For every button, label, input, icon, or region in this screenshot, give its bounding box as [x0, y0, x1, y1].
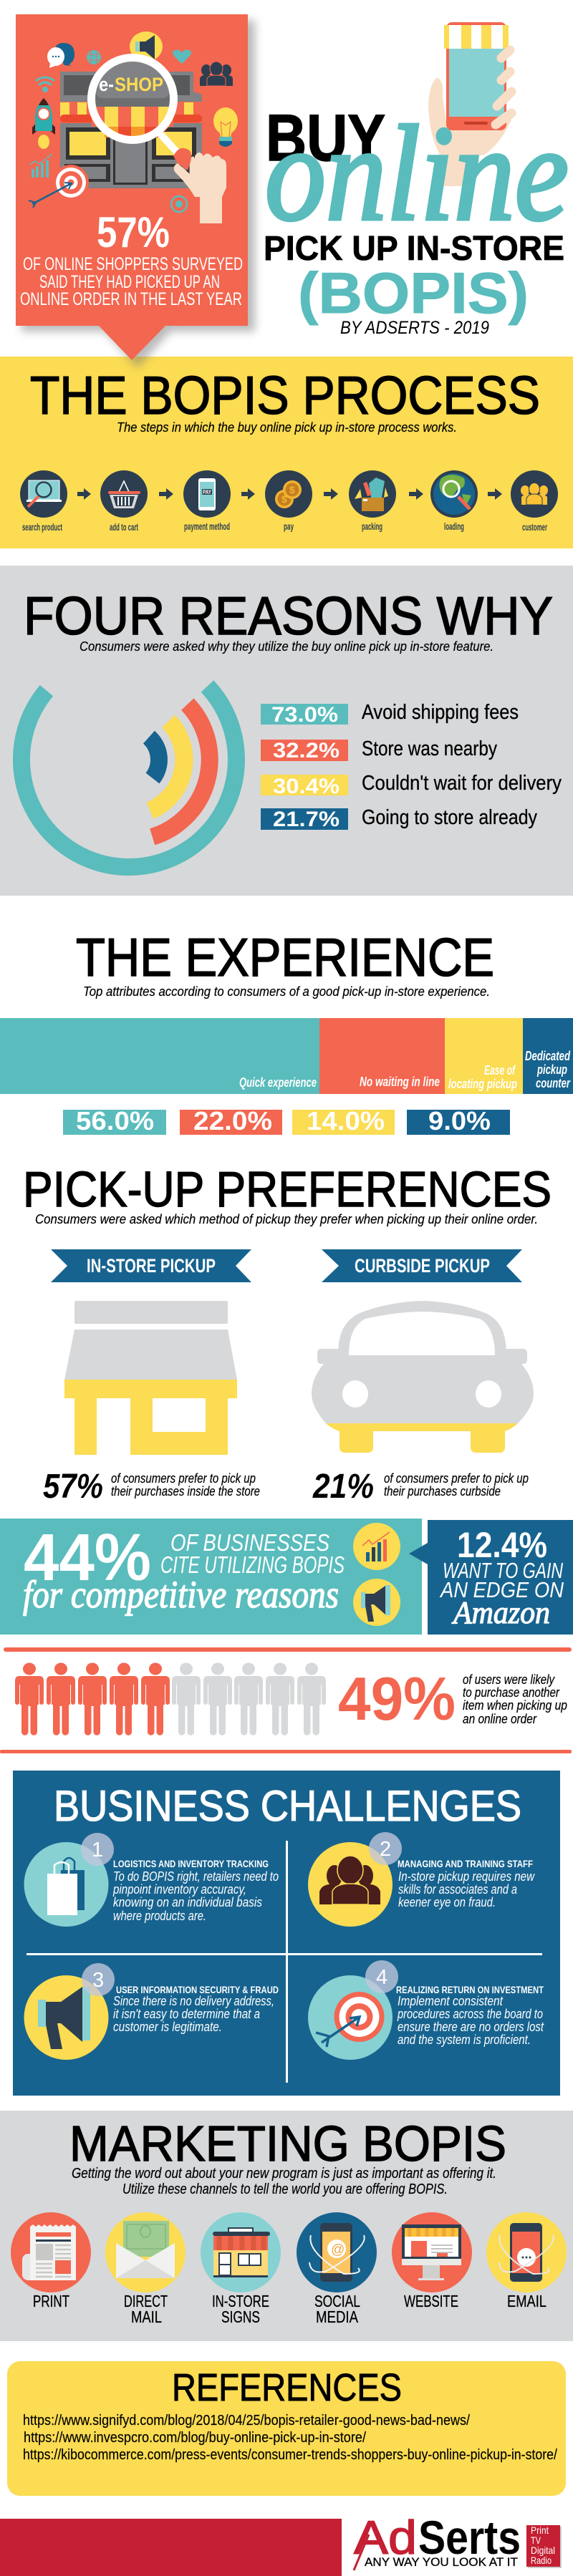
panel: business challenges: [13, 1771, 560, 2096]
text: want to gain an edge on: [439, 1558, 564, 1602]
step: payment method: PAY: [203, 489, 212, 495]
reference links: [23, 2413, 557, 2463]
challenge 1: logistics and inventory tracking: To do BOPIS right, retailers need to: [113, 1869, 279, 1884]
heading: REFERENCES: [172, 2366, 402, 2409]
heading: THE EXPERIENCE: [76, 927, 494, 987]
challenge 3: user information security and fraud: 3: [92, 1969, 104, 1992]
legend item: could not wait: 30.4%: [273, 775, 340, 798]
arrow: [488, 488, 502, 500]
value: 56 percent: 56.0%: [76, 1106, 154, 1136]
step: pay: $: [289, 484, 295, 495]
subheading: Getting the word out about your new program is just as important as offering it.: [72, 2166, 496, 2182]
challenge 4: realizing return on investment: [308, 1960, 544, 2060]
subheading: Consumers were asked why they utilize the buy online pick up in-store feature.: [80, 639, 493, 654]
legend item: avoid shipping fees: 73.0%: [271, 703, 338, 727]
legend item: store was nearby: Store was nearby: [362, 737, 497, 760]
step: add to cart: [100, 470, 148, 533]
stat: 57 percent in store: 57%: [43, 1468, 103, 1506]
icon: megaphone badge: [353, 1579, 400, 1626]
stacked bar chart: [0, 1018, 573, 1094]
logo: AdSerts: ANY WAY YOU LOOK AT IT: [365, 2555, 518, 2569]
stacked bar chart: Quick experience: [239, 1075, 317, 1090]
icon: rocket: [32, 98, 55, 149]
challenge 4: realizing return on investment: 4: [376, 1966, 387, 1989]
icon: megaphone badge: [130, 32, 163, 62]
step: pay: [265, 470, 312, 532]
icon: storefront: [60, 57, 202, 188]
text: surveyed shoppers description: OF ONLINE SHOPPERS SURVEYED: [23, 254, 243, 274]
step: pay: pay: [284, 520, 294, 532]
logo: AdSerts: Serts: [418, 2511, 521, 2564]
channel labels: [33, 2292, 546, 2326]
icon: globe: [87, 50, 101, 64]
logo: AdSerts: Print: [531, 2524, 549, 2536]
icon: chart badge: [353, 1523, 400, 1570]
channel labels: SIGNS: [221, 2308, 260, 2326]
challenge 2: managing and training staff: keener eye on fraud.: [398, 1895, 496, 1909]
radial bar chart: [21, 686, 236, 867]
reference links: https://www.signifyd.com/blog/2018/04/25/bopis-retailer-good-news-bad-news/: [23, 2413, 470, 2429]
text: of businesses cite utilizing BOPIS: [160, 1529, 345, 1578]
title line: pick up in-store: PICK UP IN-STORE: [264, 230, 564, 268]
legend item: avoid shipping fees: Avoid shipping fees: [362, 701, 519, 724]
value: 22 percent: 22.0%: [193, 1106, 272, 1136]
script text: for competitive reasons: for competitive reasons: [23, 1573, 339, 1616]
panel: 49 percent repeat purchase: [0, 1647, 572, 1753]
icon: pointing hand: [173, 148, 226, 223]
challenge 1: logistics and inventory tracking: where products are.: [113, 1909, 206, 1923]
channel labels: WEBSITE: [404, 2292, 458, 2310]
icon: light bulb: [213, 107, 238, 147]
logo: AdSerts: TV: [531, 2534, 541, 2546]
challenge 1: logistics and inventory tracking: pinpoint inventory accuracy,: [112, 1882, 246, 1897]
challenge 2: managing and training staff: MANAGING AND TRAINING STAFF: [398, 1858, 533, 1869]
arrow: [324, 488, 338, 500]
subheading: The steps in which the buy online pick up in-store process works.: [117, 420, 457, 435]
legend item: avoid shipping fees: [261, 701, 519, 727]
channel: direct mail: [105, 2212, 186, 2292]
text: of businesses cite utilizing BOPIS: OF BUSINESSES: [170, 1529, 329, 1556]
ribbon: in-store pickup: [51, 1249, 251, 1282]
stacked bar chart: Ease of: [484, 1063, 516, 1078]
step: search product: [20, 470, 67, 533]
value: 9 percent: 9.0%: [428, 1106, 491, 1136]
icon: magnifying glass: [92, 57, 180, 156]
icon: growth chart: [29, 154, 52, 178]
channel: print: [11, 2212, 91, 2292]
icon: hand holding phone: [428, 22, 512, 186]
heading: MARKETING BOPIS: [69, 2116, 506, 2171]
stat: 21 percent curbside: their purchases curbside: [384, 1484, 501, 1498]
legend item: going to store already: [261, 806, 537, 831]
text: of businesses cite utilizing BOPIS: CITE UTILIZING BOPIS: [160, 1551, 345, 1578]
icon: car pictogram: [312, 1301, 534, 1453]
icon: store pictogram: [64, 1301, 237, 1455]
challenge 1: logistics and inventory tracking: 1: [92, 1839, 103, 1861]
channel labels: EMAIL: [507, 2292, 546, 2310]
channel: in-store signs: [201, 2212, 281, 2292]
stacked bar chart: No waiting in line: [360, 1075, 440, 1089]
channel: social media: @: [331, 2242, 345, 2257]
stat: 44 percent: 44%: [24, 1520, 151, 1594]
stat: 57 percent in store: of consumers prefer to pick up: [111, 1471, 256, 1486]
channel labels: SOCIAL: [314, 2292, 360, 2310]
channel labels: DIRECT: [124, 2292, 168, 2310]
step: loading: loading: [444, 520, 464, 532]
stat: 21 percent curbside: of consumers prefer to pick up: [384, 1471, 529, 1486]
step: customer: [511, 470, 558, 533]
pictogram: ten people: [15, 1662, 326, 1735]
reference links: https://www.invespcro.com/blog/buy-online-pick-up-in-store/: [24, 2430, 366, 2446]
channel: email: [486, 2212, 567, 2292]
arrow: [241, 488, 255, 500]
icon: people: [200, 62, 233, 86]
footer band: [0, 2519, 342, 2576]
challenge 4: realizing return on investment: Implement consistent: [398, 1994, 504, 2008]
challenge 3: user information security and fraud: it isn't easy to determine that a: [113, 2007, 260, 2021]
channel: website: [392, 2212, 472, 2292]
icon: wifi: [36, 77, 54, 92]
panel: 44 percent of businesses: [0, 1519, 422, 1635]
stat: 57 percent in store: [43, 1468, 260, 1506]
challenge 2: managing and training staff: 2: [380, 1838, 391, 1861]
channel labels: MAIL: [131, 2308, 162, 2326]
subheading: Utilize these channels to tell the world you are offering BOPIS.: [122, 2182, 448, 2197]
heading: BUSINESS CHALLENGES: [54, 1782, 521, 1830]
challenge 2: managing and training staff: [308, 1832, 535, 1927]
stat: 49 percent: 49%: [338, 1665, 456, 1733]
panel: marketing BOPIS: [0, 2111, 573, 2341]
channel: social media: [297, 2212, 377, 2292]
step: loading: [430, 470, 478, 532]
panel: pick-up preferences: [23, 1161, 552, 1506]
challenge 4: realizing return on investment: ensure there are no orders lost: [398, 2020, 544, 2034]
value: 14 percent: 14.0%: [307, 1106, 385, 1136]
step: add to cart: add to cart: [110, 521, 138, 533]
logo: AdSerts: Digital: [531, 2544, 555, 2556]
logo: AdSerts: Ad: [354, 2511, 417, 2564]
ribbon: curbside pickup: [322, 1249, 522, 1282]
panel: 57% of online shoppers callout: [16, 14, 255, 368]
stat: 12.4 percent: 12.4%: [457, 1525, 547, 1565]
shop sign text: SHOP: [115, 74, 163, 95]
challenge 3: user information security and fraud: [24, 1963, 279, 2060]
logo: AdSerts: [354, 2511, 562, 2570]
stat: 57 percent in store: their purchases inside the store: [111, 1484, 260, 1498]
arrow: [159, 488, 173, 500]
byline: BY ADSERTS - 2019: [340, 318, 489, 338]
step: pay: $: [281, 493, 287, 505]
title word: BUY: BUY: [266, 102, 385, 175]
challenge 4: realizing return on investment: procedures across the board to: [397, 2007, 543, 2021]
legend item: store was nearby: [261, 737, 497, 762]
legend item: going to store already: 21.7%: [273, 808, 340, 831]
step: packing: packing: [362, 520, 382, 532]
subheading: Top attributes according to consumers of a good pick-up in-store experience.: [83, 984, 490, 999]
legend item: going to store already: Going to store already: [362, 806, 537, 829]
channel labels: IN-STORE: [212, 2292, 269, 2310]
challenge 4: realizing return on investment: and the system is proficient.: [398, 2033, 531, 2047]
challenge 2: managing and training staff: skills for associates and a: [398, 1882, 517, 1897]
step: payment method: [183, 470, 231, 532]
subheading: Consumers were asked which method of pickup they prefer when picking up their online order.: [35, 1212, 538, 1226]
text: surveyed shoppers description: SAID THEY HAD PICKED UP AN: [39, 272, 220, 292]
challenge 1: logistics and inventory tracking: LOGISTICS AND INVENTORY TRACKING: [113, 1858, 269, 1869]
title line: BOPIS: (BOPIS): [298, 261, 529, 326]
ribbon: in-store pickup: IN-STORE PICKUP: [87, 1255, 216, 1277]
text: likely to purchase another item: of users were likely: [463, 1672, 555, 1687]
text: likely to purchase another item: [463, 1672, 567, 1726]
channel labels: MEDIA: [316, 2308, 359, 2326]
panel: four reasons why: [0, 566, 573, 896]
step: customer: customer: [522, 521, 547, 533]
shop sign text: [99, 74, 163, 95]
panel: the BOPIS process: [0, 357, 573, 548]
ribbon: curbside pickup: CURBSIDE PICKUP: [355, 1255, 490, 1277]
arrow: [77, 488, 91, 500]
value: 9 percent: [407, 1106, 510, 1136]
icon: speech bubbles: [47, 43, 74, 68]
icon: small concentric circles: [171, 196, 187, 212]
icon: heart: [173, 49, 191, 64]
text: surveyed shoppers description: ONLINE ORDER IN THE LAST YEAR: [20, 289, 242, 309]
subheading: [72, 2166, 496, 2197]
step: payment method: payment method: [184, 520, 230, 532]
title: Buy Online Pick Up In-Store (BOPIS): [264, 99, 569, 338]
stat: 21 percent curbside: 21%: [312, 1468, 374, 1506]
legend item: store was nearby: 32.2%: [273, 739, 340, 762]
logo: AdSerts: Radio: [531, 2555, 552, 2566]
legend item: could not wait: [261, 772, 562, 798]
stat: 21 percent curbside: [312, 1468, 529, 1506]
stacked bar chart: locating pickup: [448, 1077, 517, 1091]
challenge 2: managing and training staff: In-store pickup requires new: [398, 1869, 535, 1884]
stat: 57 percent: 57%: [97, 208, 170, 256]
text: surveyed shoppers description: [20, 254, 243, 309]
challenge 3: user information security and fraud: customer is legitimate.: [113, 2020, 222, 2034]
panel: 12.4 percent Amazon callout: [409, 1520, 573, 1635]
panel: the experience: [0, 927, 573, 1136]
challenge 3: user information security and fraud: USER INFORMATION SECURITY & FRAUD: [116, 1984, 279, 1995]
channel labels: PRINT: [33, 2292, 69, 2310]
challenge 3: user information security and fraud: Since there is no delivery address,: [113, 1994, 274, 2008]
shop sign text: e-: [99, 74, 114, 95]
text: likely to purchase another item: an online order: [463, 1712, 537, 1726]
arrow: [409, 488, 423, 500]
icon: target and arrow: [29, 165, 89, 208]
step: search product: search product: [22, 521, 62, 533]
challenge 1: logistics and inventory tracking: knowing on an individual basis: [113, 1895, 262, 1909]
script text: Amazon: Amazon: [451, 1595, 550, 1630]
step: packing: [349, 470, 396, 532]
panel: references: [7, 2361, 566, 2496]
challenge 1: logistics and inventory tracking: [24, 1833, 279, 1927]
